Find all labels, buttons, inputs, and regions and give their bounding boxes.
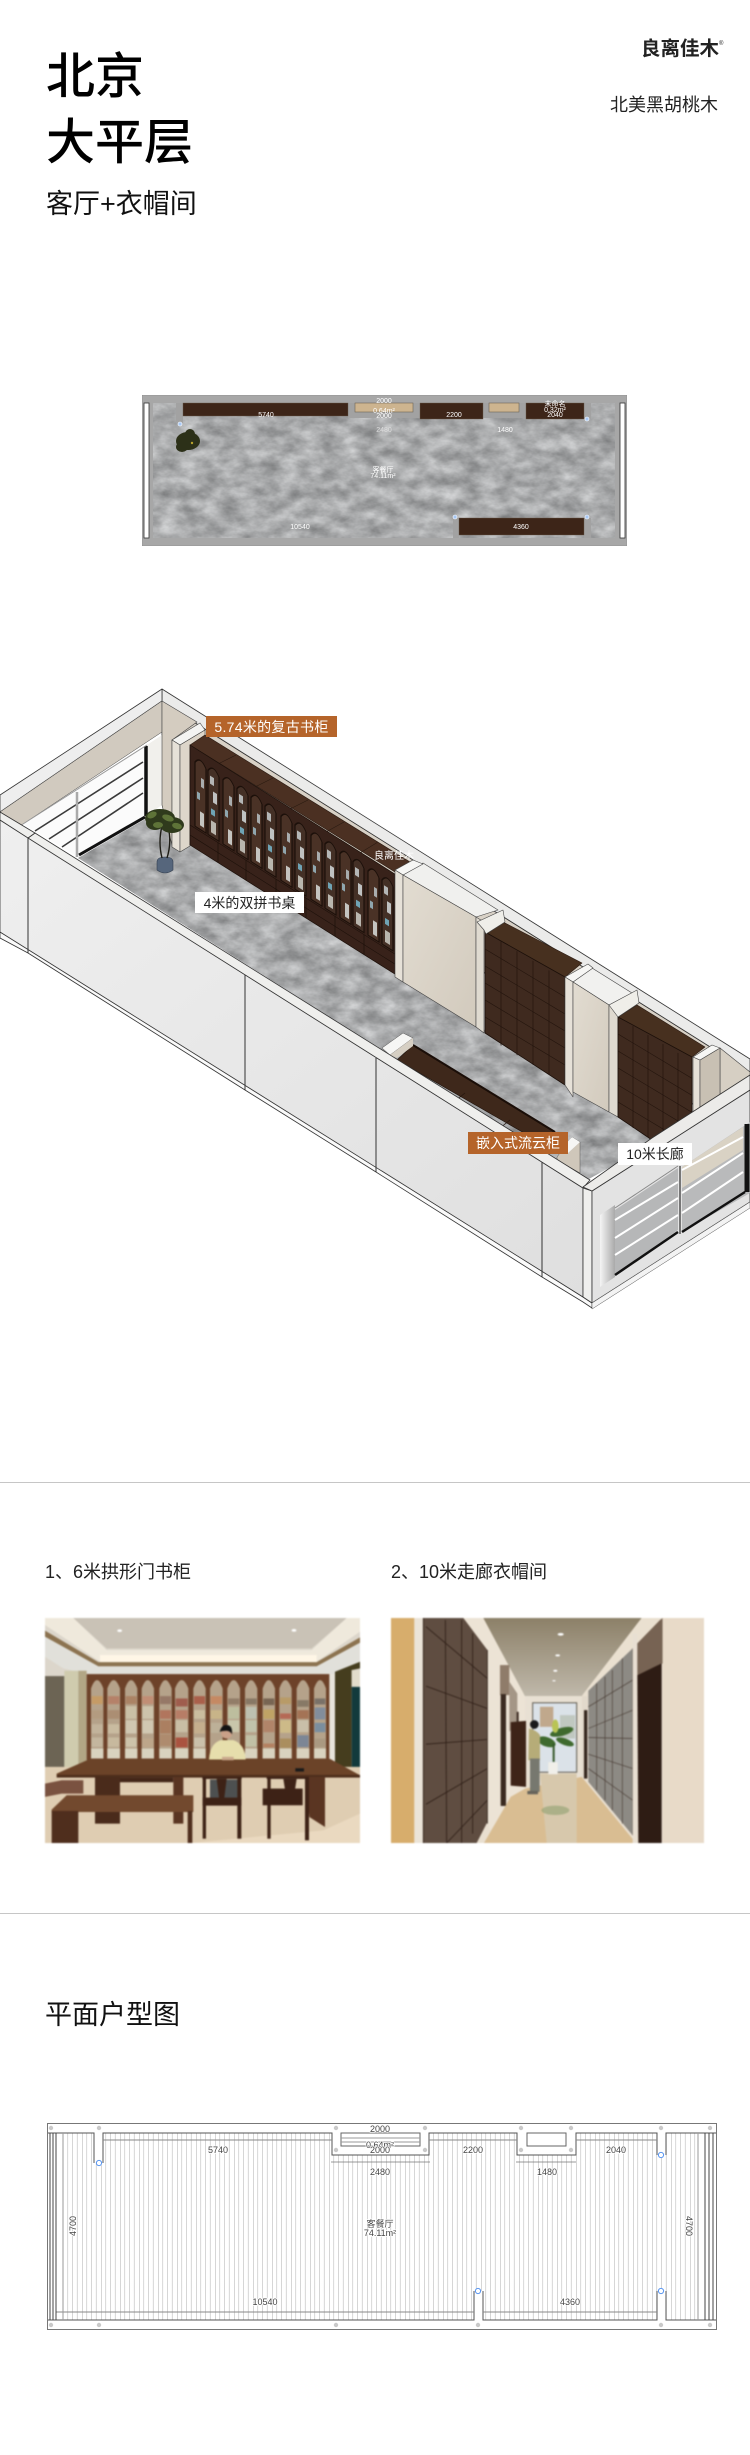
dimension labels: 4360 <box>560 2297 580 2307</box>
tan storage <box>355 403 519 412</box>
plan labels: 0.32m² <box>544 407 567 414</box>
subtitle: 客厅+衣帽间 <box>46 189 197 219</box>
plan labels: 2200 <box>446 412 462 419</box>
dimension labels: 1480 <box>537 2167 557 2177</box>
plan labels: 客餐厅 <box>372 465 394 474</box>
dimension labels: 5740 <box>208 2145 228 2155</box>
label: bookcase: 5.74米的复古书柜 <box>214 718 329 734</box>
title: 北京 <box>46 50 144 104</box>
dimension labels: 4700 <box>684 2216 694 2236</box>
dimension labels: 2200 <box>463 2145 483 2155</box>
caption two: 2、10米走廊衣帽间 <box>391 1562 547 1582</box>
flooring lines <box>63 2133 698 2320</box>
embedded cabinet <box>382 1033 580 1173</box>
dimension labels: 10540 <box>252 2297 278 2307</box>
label: embedded cabinet <box>468 1132 568 1154</box>
plan labels: 10540 <box>290 524 310 531</box>
window <box>23 745 147 857</box>
pillar dots <box>178 417 589 519</box>
bookcase <box>190 735 410 974</box>
dimension labels: 2000 <box>370 2145 390 2155</box>
icon: plant <box>176 429 200 452</box>
photo: arched bookcase <box>44 1617 361 1844</box>
brand logo: 良离佳木® <box>641 38 723 60</box>
blue markers <box>96 2152 664 2294</box>
isometric room drawing <box>0 688 750 1310</box>
left end wall <box>0 689 197 857</box>
wall piers <box>176 403 591 538</box>
end wall with window <box>583 1075 750 1309</box>
column one <box>395 860 498 1033</box>
dimension labels: 2000 <box>370 2124 390 2134</box>
pillar dots <box>49 2126 712 2327</box>
floor texture <box>153 403 615 538</box>
back wall <box>162 689 750 1140</box>
label: bookcase <box>206 716 337 737</box>
material label: 北美黑胡桃木 <box>610 95 718 115</box>
pier at bookcase <box>172 723 205 852</box>
column two <box>565 964 632 1117</box>
wardrobe panel two <box>609 990 705 1163</box>
plan labels: 1480 <box>497 427 513 434</box>
photo: corridor wardrobe <box>390 1617 704 1844</box>
front wall <box>0 812 592 1308</box>
plan labels: 未命名 <box>544 399 566 408</box>
dimension labels: 2040 <box>606 2145 626 2155</box>
label: corridor: 10米长廊 <box>626 1146 684 1162</box>
plan labels: 2040 <box>547 412 563 419</box>
cabinets <box>183 403 584 535</box>
dimension labels: 0.64m² <box>366 2140 394 2150</box>
plan labels: 5740 <box>258 412 274 419</box>
plan labels: 0.64m² <box>373 408 396 415</box>
label: corridor <box>618 1143 692 1165</box>
floor plan drawing <box>47 2123 717 2330</box>
label: embedded cabinet: 嵌入式流云柜 <box>476 1135 560 1151</box>
plan labels: 2480 <box>376 427 392 434</box>
title: 大平层 <box>46 116 193 170</box>
side windows <box>144 403 625 538</box>
plan labels: 2000 <box>376 398 392 405</box>
label: desk <box>195 892 304 913</box>
watermark logo: 良离佳木 <box>374 849 414 862</box>
dimension labels: 74.11m² <box>364 2228 396 2238</box>
plan labels: 74.11m² <box>370 473 396 480</box>
dimension labels: 4700 <box>68 2216 78 2236</box>
wardrobe panel one <box>477 910 582 1085</box>
dimension labels: 客餐厅 <box>366 2218 394 2229</box>
label: desk: 4米的双拼书桌 <box>204 894 295 910</box>
floor plan heading: 平面户型图 <box>45 2000 180 2030</box>
dimension labels <box>68 2124 694 2307</box>
plan labels: 2000 <box>376 413 392 420</box>
plan labels <box>258 398 567 531</box>
wall outline <box>48 2124 716 2329</box>
icon: potted plant <box>145 809 184 873</box>
column three <box>693 1045 750 1115</box>
caption one: 1、6米拱形门书柜 <box>45 1562 191 1582</box>
top view floor plan <box>142 395 627 546</box>
dimension labels: 2480 <box>370 2167 390 2177</box>
title <box>46 50 193 170</box>
plan labels: 4360 <box>513 524 529 531</box>
floor <box>70 810 670 1190</box>
